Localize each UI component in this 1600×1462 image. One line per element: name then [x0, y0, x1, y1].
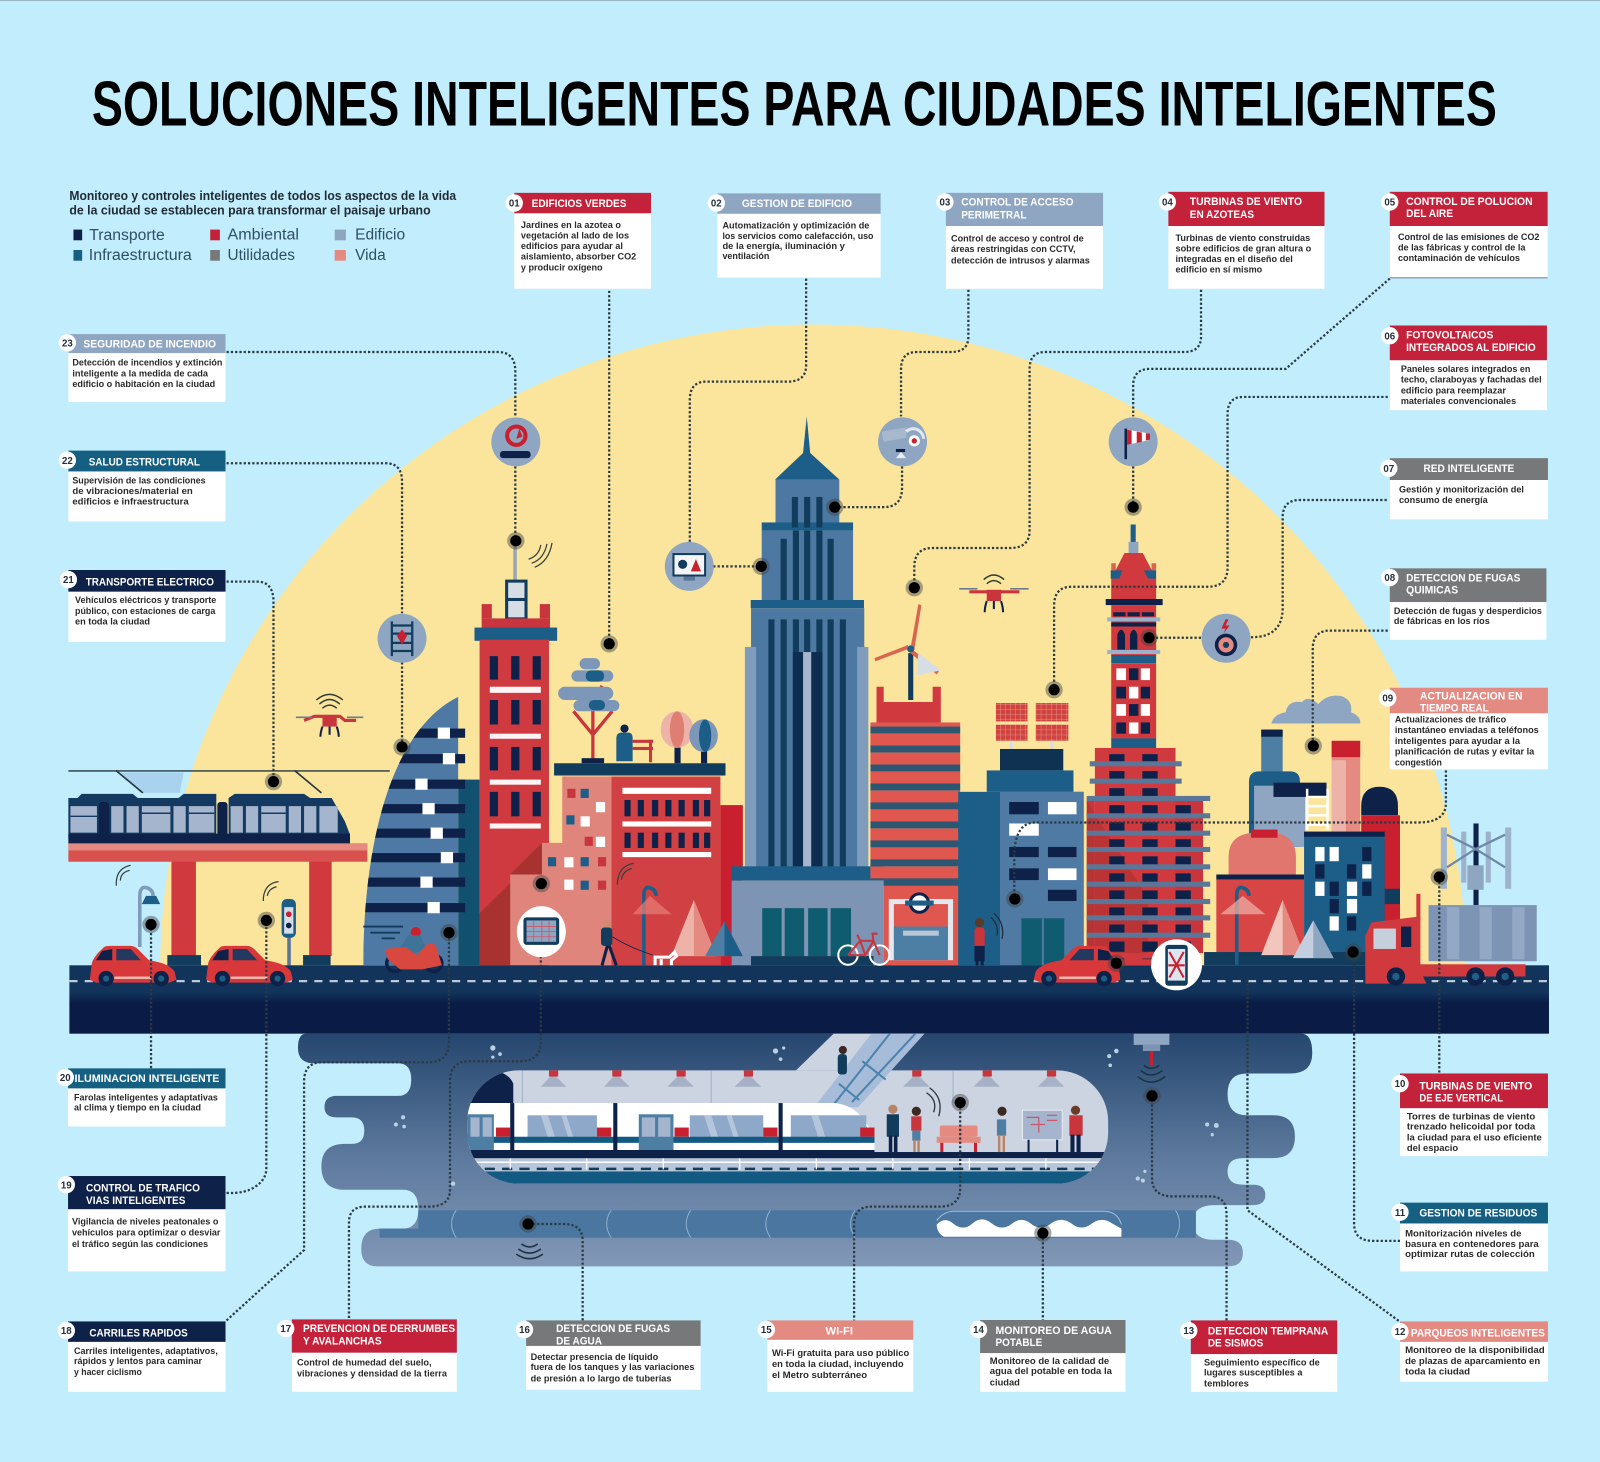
card 13: detección temprana de sismos — [1180, 1320, 1337, 1392]
card 17: prevención de derrumbes: PREVENCION DE DERRUMBES — [303, 1323, 455, 1335]
card 13: detección temprana de sismos: DETECCION TEMPRANA — [1208, 1325, 1329, 1337]
card 04: turbinas de viento en azoteas: EN AZOTEAS — [1190, 209, 1254, 221]
card 11: gestion de residuos: optimizar rutas de colección — [1405, 1249, 1535, 1260]
card 10: turbinas eje vertical: del espacio — [1407, 1143, 1458, 1154]
card 19: control de tráfico: vehículos para optimizar o desviar — [72, 1228, 221, 1239]
truck and container — [1365, 894, 1537, 986]
card 19: control de tráfico: Vigilancia de niveles peatonales o — [72, 1216, 219, 1227]
card 10: turbinas eje vertical: TURBINAS DE VIENTO — [1419, 1080, 1532, 1092]
card 16: detección de fugas de agua: 16 — [519, 1325, 530, 1336]
card 02: gestion de edificio: ventilación — [722, 251, 770, 262]
solar panels — [996, 703, 1068, 750]
card 08: detección de fugas químicas — [1381, 568, 1546, 640]
card 04: turbinas de viento en azoteas — [1159, 192, 1324, 289]
card 23: seguridad de incendio — [59, 334, 226, 402]
card 11: gestion de residuos — [1391, 1203, 1548, 1271]
card 11: gestion de residuos: basura en contenedores para — [1405, 1239, 1539, 1250]
card 22: salud estructural: Supervisión de las condiciones — [72, 476, 206, 487]
card 18: carriles rápidos: Carriles inteligentes, adaptativos, — [74, 1346, 218, 1357]
card 01: edificios verdes: edificios para ayudar al — [521, 241, 623, 252]
card 04: turbinas de viento en azoteas: 04 — [1162, 198, 1173, 209]
card 16: detección de fugas de agua: fuera de los tanques y las variaciones — [531, 1362, 694, 1373]
card 15: wi-fi: 15 — [761, 1325, 772, 1336]
card 06: fotovoltaicos integrados: 06 — [1384, 331, 1396, 342]
card 14: monitoreo de agua potable: POTABLE — [996, 1337, 1042, 1349]
card 06: fotovoltaicos integrados: edificio para reemplazar — [1401, 385, 1506, 396]
factory — [1204, 730, 1400, 965]
icon: fire safety — [491, 417, 540, 466]
card 01: edificios verdes: aislamiento, absorber CO2 — [521, 252, 636, 263]
smoke cloud — [1271, 696, 1360, 723]
card 23: seguridad de incendio: inteligente a la medida de cada — [72, 368, 209, 379]
card 16: detección de fugas de agua: DETECCION DE FUGAS — [556, 1323, 670, 1335]
card 13: detección temprana de sismos: lugares susceptibles a — [1204, 1368, 1303, 1379]
card 21: transporte eléctrico: público, con estaciones de carga — [75, 606, 216, 617]
card 23: seguridad de incendio: edificio o habitación en la ciudad — [72, 379, 215, 390]
card 03: control de acceso perimetral: 03 — [940, 198, 951, 209]
card 09: actualización en tiempo real: TIEMPO REAL — [1420, 703, 1489, 715]
card 09: actualización en tiempo real: inteligentes para ayudar a la — [1395, 736, 1521, 747]
card 09: actualización en tiempo real: planificación de rutas y evitar la — [1395, 747, 1535, 758]
card 22: salud estructural: 22 — [62, 456, 73, 467]
wifi arcs on buildings — [116, 543, 634, 901]
sun dome — [160, 324, 1466, 969]
legend: Transporte — [89, 227, 165, 244]
card 02: gestion de edificio — [708, 193, 881, 278]
card 10: turbinas eje vertical: la ciudad para el uso eficiente — [1407, 1132, 1542, 1143]
card 21: transporte eléctrico — [60, 570, 226, 642]
card 05: control de polucion del aire: 05 — [1384, 198, 1396, 209]
card 02: gestion de edificio: GESTION DE EDIFICIO — [742, 198, 852, 210]
pink and red mid-rise — [510, 763, 743, 965]
card 20: iluminación inteligente: Farolas inteligentes y adaptativas — [74, 1092, 218, 1103]
card 13: detección temprana de sismos: temblores — [1204, 1379, 1249, 1390]
card 17: prevención de derrumbes: 17 — [280, 1324, 291, 1335]
card 06: fotovoltaicos integrados — [1381, 326, 1547, 410]
card 19: control de tráfico — [58, 1176, 226, 1271]
legend: Edificio — [355, 226, 405, 243]
bicycle — [838, 934, 889, 965]
legend: Utilidades — [228, 247, 295, 264]
runner and dog — [601, 920, 677, 965]
card 03: control de acceso perimetral: Control de acceso y control de — [951, 233, 1084, 244]
card 16: detección de fugas de agua: DE AGUA — [556, 1335, 602, 1347]
card 11: gestion de residuos: GESTION DE RESIDUOS — [1419, 1207, 1537, 1219]
card 19: control de tráfico: VIAS INTELIGENTES — [86, 1195, 185, 1207]
icon: structural health — [378, 614, 427, 663]
card 13: detección temprana de sismos: Seguimiento específico de — [1204, 1357, 1320, 1368]
legend: Infraestructura — [89, 247, 192, 264]
underground blob — [298, 1034, 1312, 1266]
card 10: turbinas eje vertical: trenzado helicoidal por toda — [1407, 1122, 1536, 1133]
card 02: gestion de edificio: de la energía, iluminación y — [722, 241, 846, 252]
card 18: carriles rápidos: y hacer ciclismo — [74, 1367, 142, 1378]
card 19: control de tráfico: el tráfico según las condiciones — [72, 1239, 208, 1250]
card 12: parqueos inteligentes: PARQUEOS INTELIGENTES — [1411, 1327, 1545, 1339]
card 15: wi-fi: Wi-Fi gratuita para uso público — [772, 1348, 909, 1359]
card 04: turbinas de viento en azoteas: TURBINAS DE VIENTO — [1190, 196, 1302, 208]
intro text: de la ciudad se establecen para transformar el paisaje urbano — [69, 202, 431, 217]
card 08: detección de fugas químicas: QUIMICAS — [1406, 585, 1458, 597]
card 12: parqueos inteligentes: de plazas de aparcamiento en — [1405, 1356, 1540, 1367]
card 08: detección de fugas químicas: DETECCION DE FUGAS — [1406, 572, 1520, 584]
curved shard building — [357, 697, 480, 965]
card 11: gestion de residuos: Monitorización niveles de — [1405, 1228, 1521, 1239]
card 01: edificios verdes — [506, 193, 651, 289]
card 07: red inteligente: RED INTELIGENTE — [1423, 463, 1514, 475]
road — [69, 965, 1549, 1034]
card 01: edificios verdes: Jardines en la azotea o — [521, 220, 621, 231]
card 15: wi-fi — [758, 1320, 913, 1392]
sensor dots — [142, 498, 1448, 1242]
card 11: gestion de residuos: 11 — [1395, 1208, 1406, 1219]
water leak signal waves — [516, 1244, 543, 1259]
card 17: prevención de derrumbes: Control de humedad del suelo, — [297, 1358, 432, 1369]
card 14: monitoreo de agua potable — [970, 1320, 1126, 1392]
platform passengers — [838, 1046, 1083, 1152]
red tower with antenna — [474, 540, 557, 965]
card 03: control de acceso perimetral: PERIMETRAL — [961, 209, 1027, 221]
card 07: red inteligente: Gestión y monitorización del — [1399, 484, 1524, 495]
card 01: edificios verdes: y producir oxígeno — [521, 262, 603, 273]
card 15: wi-fi: el Metro subterráneo — [772, 1370, 867, 1381]
card 16: detección de fugas de agua — [516, 1320, 701, 1390]
motorbike — [363, 927, 442, 971]
card 20: iluminación inteligente: 20 — [60, 1073, 71, 1084]
card 05: control de polucion del aire: Control de las emisiones de CO2 — [1398, 232, 1539, 243]
card 02: gestion de edificio: 02 — [711, 199, 722, 210]
card 22: salud estructural: SALUD ESTRUCTURAL — [89, 456, 200, 468]
card 02: gestion de edificio: Automatización y optimización de — [722, 221, 869, 232]
card 03: control de acceso perimetral: CONTROL DE ACCESO — [961, 197, 1073, 209]
top edge line — [0, 0, 1600, 1]
woman with phone — [974, 913, 1003, 965]
card 19: control de tráfico: 19 — [61, 1180, 72, 1191]
rooftop wind turbine — [874, 604, 941, 700]
card 14: monitoreo de agua potable: Monitoreo de la calidad de — [990, 1356, 1109, 1367]
card 05: control de polucion del aire: contaminación de vehículos — [1398, 253, 1520, 264]
card 04: turbinas de viento en azoteas: sobre edificios de gran altura o — [1176, 243, 1311, 254]
card 16: detección de fugas de agua: de presión a lo largo de tuberías — [531, 1374, 671, 1385]
card 04: turbinas de viento en azoteas: integradas en el diseño del — [1176, 254, 1293, 265]
card 03: control de acceso perimetral: detección de intrusos y alarmas — [951, 255, 1090, 266]
icon: smartphone map — [1151, 939, 1202, 990]
vertical axis wind turbine — [1441, 823, 1511, 905]
cars — [90, 946, 1120, 986]
trees and triangle shapes — [671, 900, 1334, 958]
card 08: detección de fugas químicas: Detección de fugas y desperdicios — [1394, 606, 1542, 617]
card 20: iluminación inteligente: ILUMINACION INTELIGENTE — [74, 1073, 219, 1085]
card 12: parqueos inteligentes: toda la ciudad — [1405, 1366, 1470, 1377]
legend: Ambiental — [228, 226, 299, 243]
rooftop round trees — [661, 711, 718, 763]
card 01: edificios verdes: vegetación al lado de los — [521, 230, 629, 241]
card 04: turbinas de viento en azoteas: edificio en sí mismo — [1176, 264, 1262, 275]
icon: access control camera — [878, 417, 927, 466]
connector lines — [151, 279, 1446, 1321]
card 21: transporte eléctrico: en toda la ciudad — [75, 616, 150, 627]
central skyscraper — [732, 416, 884, 965]
elevated train and viaduct — [68, 770, 390, 965]
icon: smart grid — [1202, 614, 1251, 663]
street lamps — [140, 887, 1265, 965]
card 18: carriles rápidos: rápidos y lentos para caminar — [74, 1356, 202, 1367]
card 22: salud estructural: de vibraciones/material en — [72, 486, 193, 497]
card 08: detección de fugas químicas: de fábricas en los ríos — [1394, 616, 1490, 627]
card 06: fotovoltaicos integrados: techo, claraboyas y fachadas del — [1401, 374, 1542, 385]
card 20: iluminación inteligente — [57, 1068, 226, 1127]
card 23: seguridad de incendio: 23 — [62, 338, 73, 349]
card 22: salud estructural: edificios e infraestructura — [72, 497, 189, 508]
card 07: red inteligente — [1380, 458, 1548, 519]
card 21: transporte eléctrico: 21 — [63, 575, 74, 586]
legend — [73, 226, 405, 264]
card 02: gestion de edificio: los servicios como calefacción, uso — [722, 231, 874, 242]
card 14: monitoreo de agua potable: MONITOREO DE AGUA — [996, 1325, 1112, 1337]
card 09: actualización en tiempo real: congestión — [1395, 757, 1442, 768]
card 18: carriles rápidos: 18 — [61, 1326, 72, 1337]
roof tree and person on bench — [558, 658, 653, 763]
card 09: actualización en tiempo real: Actualizaciones de tráfico — [1395, 714, 1506, 725]
traffic signal — [282, 899, 296, 965]
card 17: prevención de derrumbes: vibraciones y densidad de la tierra — [297, 1369, 448, 1380]
card 01: edificios verdes: EDIFICIOS VERDES — [532, 198, 627, 210]
card 07: red inteligente: consumo de energía — [1399, 495, 1488, 506]
card 05: control de polucion del aire: DEL AIRE — [1406, 208, 1453, 220]
card 21: transporte eléctrico: TRANSPORTE ELECTRICO — [86, 576, 214, 588]
card 15: wi-fi: en toda la ciudad, incluyendo — [772, 1359, 904, 1370]
card 05: control de polucion del aire: CONTROL DE POLUCION — [1406, 196, 1533, 208]
brick tower with spire — [1087, 524, 1210, 965]
card 05: control de polucion del aire: de las fábricas y control de la — [1398, 242, 1526, 253]
intro text — [69, 188, 457, 217]
card 14: monitoreo de agua potable: agua del potable en toda la — [990, 1366, 1113, 1377]
drone left — [296, 694, 363, 737]
card 08: detección de fugas químicas: 08 — [1384, 573, 1396, 584]
card 04: turbinas de viento en azoteas: Turbinas de viento construidas — [1176, 233, 1310, 244]
card 07: red inteligente: 07 — [1383, 464, 1394, 475]
water pipe — [380, 1210, 1196, 1238]
card 10: turbinas eje vertical — [1391, 1073, 1548, 1156]
card 03: control de acceso perimetral: áreas restringidas con CCTV, — [951, 244, 1076, 255]
card 12: parqueos inteligentes — [1391, 1321, 1548, 1382]
card 14: monitoreo de agua potable: ciudad — [990, 1377, 1020, 1388]
card 06: fotovoltaicos integrados: materiales convencionales — [1401, 396, 1516, 407]
card 22: salud estructural — [59, 451, 226, 521]
card 06: fotovoltaicos integrados: Paneles solares integrados en — [1401, 364, 1531, 375]
card 20: iluminación inteligente: al clima y tiempo en la ciudad — [74, 1103, 201, 1114]
striped red building with metro entrance — [870, 687, 960, 965]
card 17: prevención de derrumbes — [277, 1319, 457, 1392]
card 15: wi-fi: WI-FI — [826, 1325, 853, 1337]
drone right — [959, 575, 1029, 612]
card 17: prevención de derrumbes: Y AVALANCHAS — [303, 1336, 382, 1348]
card 09: actualización en tiempo real: instantáneo enviadas a teléfonos — [1395, 725, 1539, 736]
blue office building — [958, 749, 1084, 965]
underground water droplets — [394, 1045, 1219, 1186]
icon: windsock — [1109, 417, 1158, 466]
card 09: actualización en tiempo real: 09 — [1382, 694, 1394, 705]
legend: Vida — [355, 247, 386, 264]
card 09: actualización en tiempo real: ACTUALIZACION EN — [1420, 690, 1523, 702]
card 05: control de polucion del aire — [1381, 192, 1548, 279]
card 16: detección de fugas de agua: Detectar presencia de líquido — [531, 1352, 658, 1363]
card 14: monitoreo de agua potable: 14 — [973, 1325, 985, 1336]
card 03: control de acceso perimetral — [936, 193, 1103, 289]
card 19: control de tráfico: CONTROL DE TRAFICO — [86, 1183, 200, 1195]
card 06: fotovoltaicos integrados: INTEGRADOS AL EDIFICIO — [1406, 342, 1536, 354]
card 10: turbinas eje vertical: Torres de turbinas de viento — [1407, 1112, 1535, 1123]
card 09: actualización en tiempo real — [1379, 688, 1548, 769]
subway tunnel — [467, 1034, 1108, 1184]
card 13: detección temprana de sismos: DE SISMOS — [1208, 1337, 1263, 1349]
card 21: transporte eléctrico: Vehículos eléctricos y transporte — [75, 595, 216, 606]
icon: traffic tablet — [517, 906, 566, 957]
subway train — [467, 1103, 874, 1158]
card 10: turbinas eje vertical: 10 — [1395, 1079, 1405, 1090]
card 12: parqueos inteligentes: Monitoreo de la disponibilidad — [1405, 1345, 1545, 1356]
card 23: seguridad de incendio: Detección de incendios y extinción — [72, 358, 222, 369]
card 12: parqueos inteligentes: 12 — [1395, 1327, 1405, 1338]
card 23: seguridad de incendio: SEGURIDAD DE INCENDIO — [83, 339, 216, 351]
card 13: detección temprana de sismos: 13 — [1183, 1326, 1195, 1337]
seismic sensor — [1134, 1034, 1169, 1082]
card 18: carriles rápidos: CARRILES RAPIDOS — [89, 1327, 188, 1339]
card 18: carriles rápidos — [58, 1321, 226, 1392]
intro text: Monitoreo y controles inteligentes de todos los aspectos de la vida — [69, 188, 457, 203]
card 06: fotovoltaicos integrados: FOTOVOLTAICOS — [1406, 329, 1493, 341]
icon: building management — [665, 542, 714, 591]
card 01: edificios verdes: 01 — [509, 199, 520, 210]
card 10: turbinas eje vertical: DE EJE VERTICAL — [1419, 1092, 1503, 1104]
